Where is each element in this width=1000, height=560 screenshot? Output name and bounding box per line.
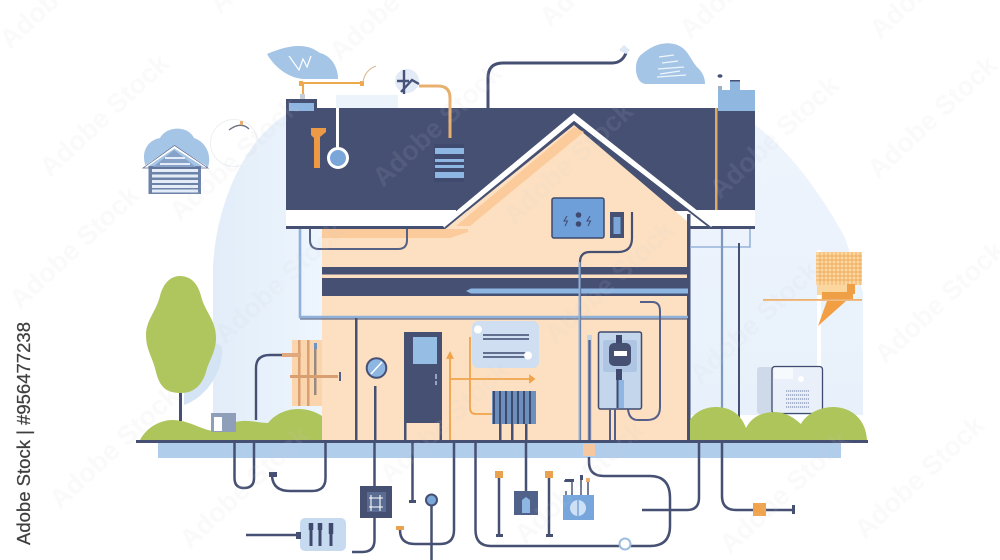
background halo <box>213 112 863 432</box>
tool plug device <box>296 518 346 551</box>
pipe manifold <box>282 340 341 406</box>
watermark grid: Adobe Stock <box>509 414 650 549</box>
eaves <box>286 210 755 229</box>
electric panel <box>552 198 604 238</box>
orange arrows <box>448 337 534 440</box>
small conduit caps <box>269 471 795 537</box>
main blue conduit <box>580 212 632 440</box>
watermark grid: Adobe Stock <box>714 424 855 559</box>
top conduit <box>488 45 630 108</box>
orange coupler <box>753 503 766 516</box>
electric meter <box>598 332 642 440</box>
outdoor unit <box>757 366 822 414</box>
watermark grid: Adobe Stock <box>374 354 515 489</box>
horizontal bands <box>322 267 688 296</box>
roof <box>286 99 755 211</box>
ring node <box>620 538 630 550</box>
underground conduits <box>234 442 793 560</box>
watermark grid: Adobe Stock <box>539 214 680 349</box>
wall switch <box>610 212 624 238</box>
chimney <box>718 74 755 111</box>
small utility box <box>211 413 236 432</box>
pale roof vent <box>336 95 398 108</box>
wall pipe <box>256 355 284 420</box>
gauge <box>367 358 386 441</box>
solar panel <box>763 252 862 326</box>
info panel <box>472 321 539 368</box>
watermark grid: Adobe Stock <box>34 47 175 182</box>
orange roof wire <box>299 66 376 99</box>
cloud with lines <box>636 43 705 84</box>
bottle box <box>514 491 538 515</box>
side lines right <box>690 229 750 440</box>
junction box <box>360 486 392 518</box>
valve icon <box>395 69 419 94</box>
upper eave conduit <box>310 229 407 249</box>
blue probe <box>426 494 437 506</box>
thin circle ornament <box>210 120 258 166</box>
curved conduit by meter <box>628 302 660 420</box>
blue toolbox <box>563 475 594 520</box>
orange pipe to vent <box>419 86 450 138</box>
radiator <box>492 391 536 440</box>
bushes right <box>690 407 867 440</box>
watermark grid: Adobe Stock <box>164 91 305 226</box>
watermark grid: Adobe Stock <box>4 179 145 314</box>
peach junction <box>583 444 595 456</box>
garage with cloud <box>143 129 209 194</box>
door <box>404 332 442 440</box>
roof vent box <box>434 144 464 182</box>
pale pipe <box>587 335 592 440</box>
watermark grid: Adobe Stock <box>684 254 825 389</box>
watermark grid: Adobe Stock <box>849 409 990 544</box>
watermark grid: Adobe Stock <box>498 95 639 230</box>
right wall line <box>687 214 690 441</box>
watermark grid: Adobe Stock <box>209 214 350 349</box>
watermark grid: Adobe Stock <box>44 379 185 514</box>
ground line <box>136 440 868 443</box>
tree <box>146 276 222 421</box>
wall line <box>355 318 358 440</box>
watermark grid: Adobe Stock <box>367 57 508 192</box>
pitched gable <box>322 117 712 268</box>
watermark grid: Adobe Stock <box>704 69 845 204</box>
watermark grid: Adobe Stock <box>174 419 315 554</box>
blue frame line <box>300 229 688 317</box>
foundation band <box>158 443 841 458</box>
house wall <box>322 226 688 440</box>
stock credit: Adobe Stock | #956477238 <box>13 322 34 545</box>
roof gauge with line <box>328 108 348 168</box>
cloud with wifi glyph <box>267 46 338 79</box>
bushes left <box>140 409 322 440</box>
orange tool on roof <box>311 128 326 168</box>
watermark grid: Adobe Stock <box>862 49 1000 184</box>
